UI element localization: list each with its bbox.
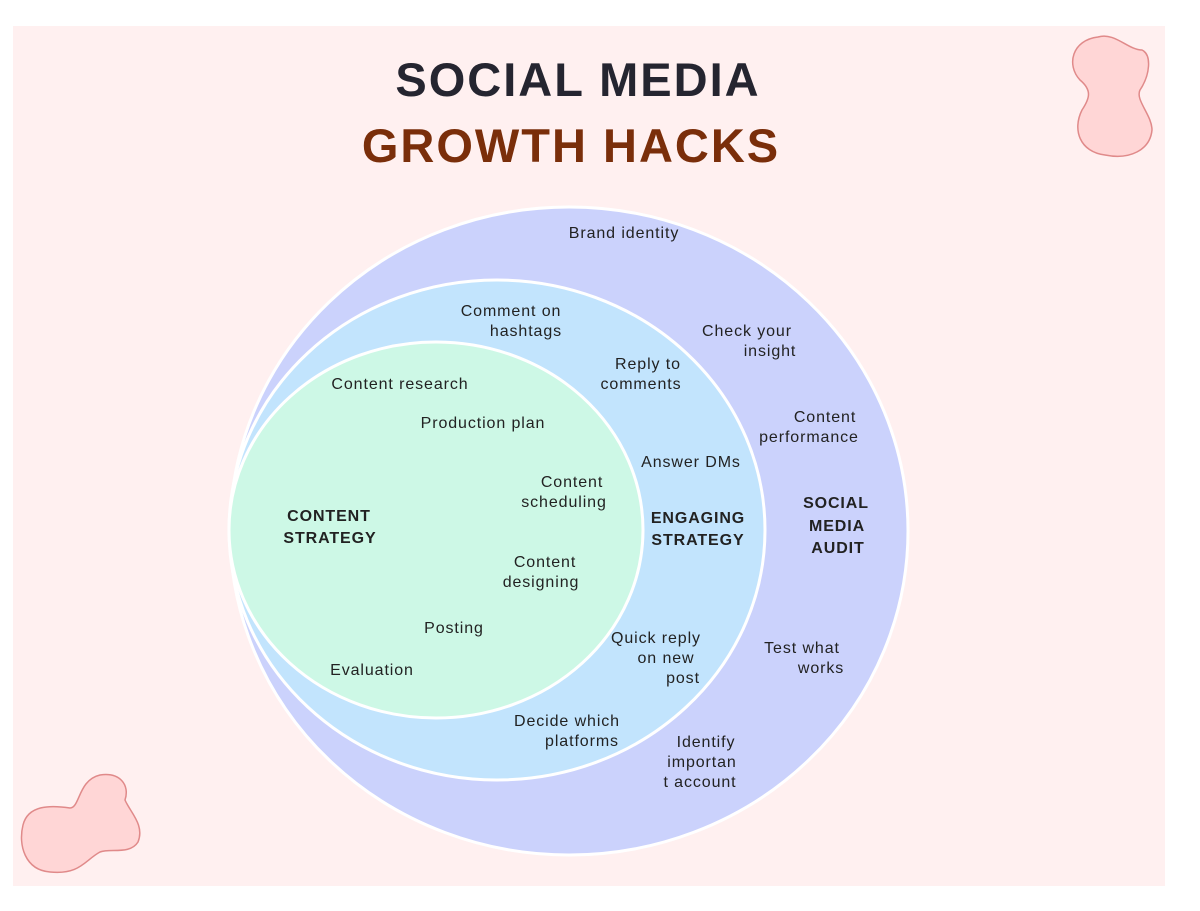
labels: content strategy: Content bbox=[541, 474, 603, 491]
labels: content strategy: Production plan bbox=[421, 415, 545, 432]
labels: engaging strategy: comments bbox=[600, 376, 682, 393]
labels: social media audit: Test what bbox=[764, 640, 840, 657]
labels: content strategy: Evaluation bbox=[330, 662, 414, 679]
labels: social media audit: SOCIAL bbox=[803, 495, 869, 512]
labels: content strategy: STRATEGY bbox=[283, 530, 377, 547]
labels: engaging strategy: Quick reply bbox=[611, 630, 701, 647]
labels: content strategy: Content research bbox=[331, 376, 469, 393]
labels: engaging strategy: hashtags bbox=[490, 323, 562, 340]
labels: engaging strategy: Answer DMs bbox=[641, 454, 741, 471]
labels: social media audit: Brand identity bbox=[569, 225, 679, 242]
title bbox=[362, 53, 780, 172]
labels: engaging strategy: on new bbox=[638, 650, 694, 667]
labels: social media audit: performance bbox=[759, 429, 859, 446]
labels: social media audit: MEDIA bbox=[809, 518, 865, 535]
labels: content strategy: Content bbox=[514, 554, 576, 571]
labels: engaging strategy: Reply to bbox=[615, 356, 681, 373]
labels: social media audit: insight bbox=[744, 343, 796, 360]
labels: engaging strategy: Comment on bbox=[461, 303, 561, 320]
labels: content strategy: scheduling bbox=[521, 494, 607, 511]
labels: social media audit: Content bbox=[794, 409, 856, 426]
labels: content strategy bbox=[283, 376, 607, 679]
labels: social media audit bbox=[569, 225, 869, 791]
title: SOCIAL MEDIA bbox=[395, 53, 761, 106]
labels: social media audit: importan bbox=[667, 754, 737, 771]
blob: top right bbox=[1073, 36, 1152, 156]
circle: engaging strategy bbox=[229, 280, 765, 780]
circle: social media audit bbox=[230, 207, 908, 855]
labels: social media audit: works bbox=[797, 660, 844, 677]
labels: social media audit: AUDIT bbox=[811, 540, 865, 557]
labels: engaging strategy: ENGAGING bbox=[651, 510, 745, 527]
labels: content strategy: CONTENT bbox=[287, 508, 371, 525]
title: GROWTH HACKS bbox=[362, 119, 780, 172]
labels: content strategy: Posting bbox=[424, 620, 484, 637]
labels: social media audit: Check your bbox=[702, 323, 792, 340]
labels: engaging strategy: platforms bbox=[545, 733, 619, 750]
labels: social media audit: Identify bbox=[677, 734, 735, 751]
labels: engaging strategy: Decide which bbox=[514, 713, 620, 730]
labels: engaging strategy: STRATEGY bbox=[651, 532, 745, 549]
labels: social media audit: t account bbox=[663, 774, 737, 791]
labels: engaging strategy: post bbox=[666, 670, 700, 687]
circle: content strategy bbox=[229, 342, 643, 718]
labels: engaging strategy bbox=[461, 303, 745, 750]
blob: bottom left bbox=[21, 775, 140, 872]
labels: content strategy: designing bbox=[503, 574, 579, 591]
